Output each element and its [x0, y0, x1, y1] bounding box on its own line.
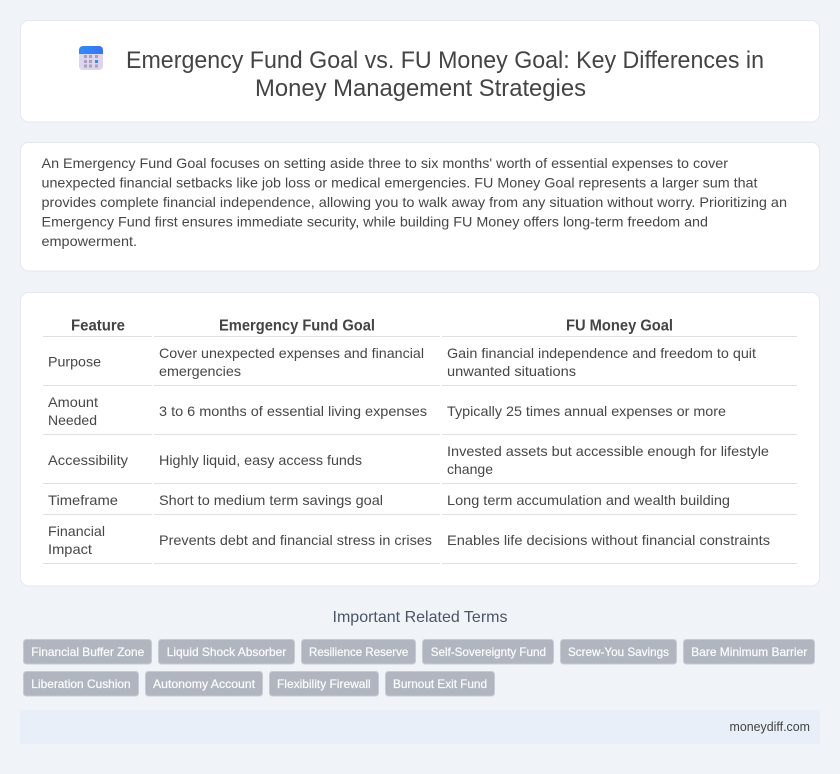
text block: introduction paragraph: empowerment.	[42, 233, 137, 249]
table row: accessibility: Accessibility	[48, 452, 128, 468]
table row: financial impact: Enables life decisions without financial constraints	[447, 532, 770, 548]
tag: Self-Sovereignty Fund: Self-Sovereignty Fund	[431, 645, 546, 659]
heading: related terms: Important Related Terms	[332, 609, 508, 626]
text block: introduction paragraph: An Emergency Fund Goal focuses on setting aside three to six months' worth of essential expenses to cover	[42, 155, 728, 171]
table row: financial impact: Impact	[48, 541, 92, 557]
table row: accessibility: Highly liquid, easy access funds	[159, 452, 362, 468]
text block: introduction paragraph	[42, 155, 787, 249]
table row: timeframe	[43, 492, 797, 515]
tag: Bare Minimum Barrier	[684, 640, 814, 664]
title	[126, 47, 764, 102]
table header row: FU Money Goal	[566, 318, 673, 334]
table row: accessibility: change	[447, 461, 493, 477]
panel: introduction	[20, 142, 820, 271]
tag: Resilience Reserve	[302, 640, 416, 664]
tag: Screw-You Savings	[560, 640, 676, 664]
table header row: Feature	[71, 318, 125, 334]
table header row	[43, 318, 797, 337]
footer: moneydiff.com	[730, 720, 810, 734]
tag: Liquid Shock Absorber: Liquid Shock Absorber	[167, 645, 286, 659]
table row: financial impact: Prevents debt and financial stress in crises	[159, 532, 432, 548]
table row: timeframe: Short to medium term savings goal	[159, 492, 383, 508]
table row: financial impact: Financial	[48, 523, 105, 539]
tag: Autonomy Account	[146, 672, 262, 696]
tag: Flexibility Firewall	[270, 672, 378, 696]
table row: amount needed	[43, 394, 797, 435]
panel: comparison table	[20, 292, 820, 586]
tag: Liberation Cushion	[24, 672, 138, 696]
text block: introduction paragraph: Emergency Fund first ensures immediate security, while building FU Money offers long-term freedom and	[42, 214, 708, 230]
tag: Screw-You Savings: Screw-You Savings	[568, 645, 669, 659]
table row: purpose	[43, 345, 797, 386]
tag: Burnout Exit Fund: Burnout Exit Fund	[393, 677, 487, 691]
tag: Financial Buffer Zone: Financial Buffer Zone	[31, 645, 145, 659]
table row: financial impact	[43, 523, 797, 564]
tag: Bare Minimum Barrier: Bare Minimum Barrier	[691, 645, 807, 659]
tag: Liquid Shock Absorber	[158, 640, 294, 664]
icon: calendar	[79, 46, 103, 70]
table row: amount needed: Needed	[48, 412, 97, 428]
table row: purpose: Purpose	[48, 354, 101, 370]
table row: amount needed: Amount	[48, 394, 98, 410]
table row: amount needed: 3 to 6 months of essential living expenses	[159, 403, 427, 419]
table row: purpose: Cover unexpected expenses and financial	[159, 345, 424, 361]
table row: accessibility: Invested assets but accessible enough for lifestyle	[447, 443, 769, 459]
title: Money Management Strategies	[255, 75, 586, 102]
table row: purpose: emergencies	[159, 363, 241, 379]
tag: Liberation Cushion: Liberation Cushion	[31, 677, 131, 691]
table row: accessibility	[43, 443, 797, 484]
tag: Autonomy Account: Autonomy Account	[153, 677, 256, 691]
table row: purpose: unwanted situations	[447, 363, 576, 379]
tag: Burnout Exit Fund	[386, 672, 494, 696]
panel: related term tags	[24, 640, 814, 696]
table row: timeframe: Long term accumulation and wealth building	[447, 492, 730, 508]
table row: amount needed: Typically 25 times annual expenses or more	[447, 403, 726, 419]
table row: timeframe: Timeframe	[48, 492, 118, 508]
table header row: Emergency Fund Goal	[219, 318, 375, 334]
text block: introduction paragraph: unexpected financial setbacks like job loss or medical emergencies. FU Money Goal represents a larger sum that	[42, 174, 758, 190]
table row: purpose: Gain financial independence and freedom to quit	[447, 345, 756, 361]
footer	[20, 710, 820, 744]
panel: header	[20, 20, 820, 122]
tag: Self-Sovereignty Fund	[422, 640, 554, 664]
tag: Financial Buffer Zone	[24, 640, 152, 664]
tag: Resilience Reserve: Resilience Reserve	[309, 645, 409, 659]
tag: Flexibility Firewall: Flexibility Firewall	[277, 677, 371, 691]
title: Emergency Fund Goal vs. FU Money Goal: Key Differences in	[126, 47, 764, 74]
text block: introduction paragraph: provides complete financial independence, allowing you to walk away from any situation without worry. Prioritizing an	[42, 194, 787, 210]
